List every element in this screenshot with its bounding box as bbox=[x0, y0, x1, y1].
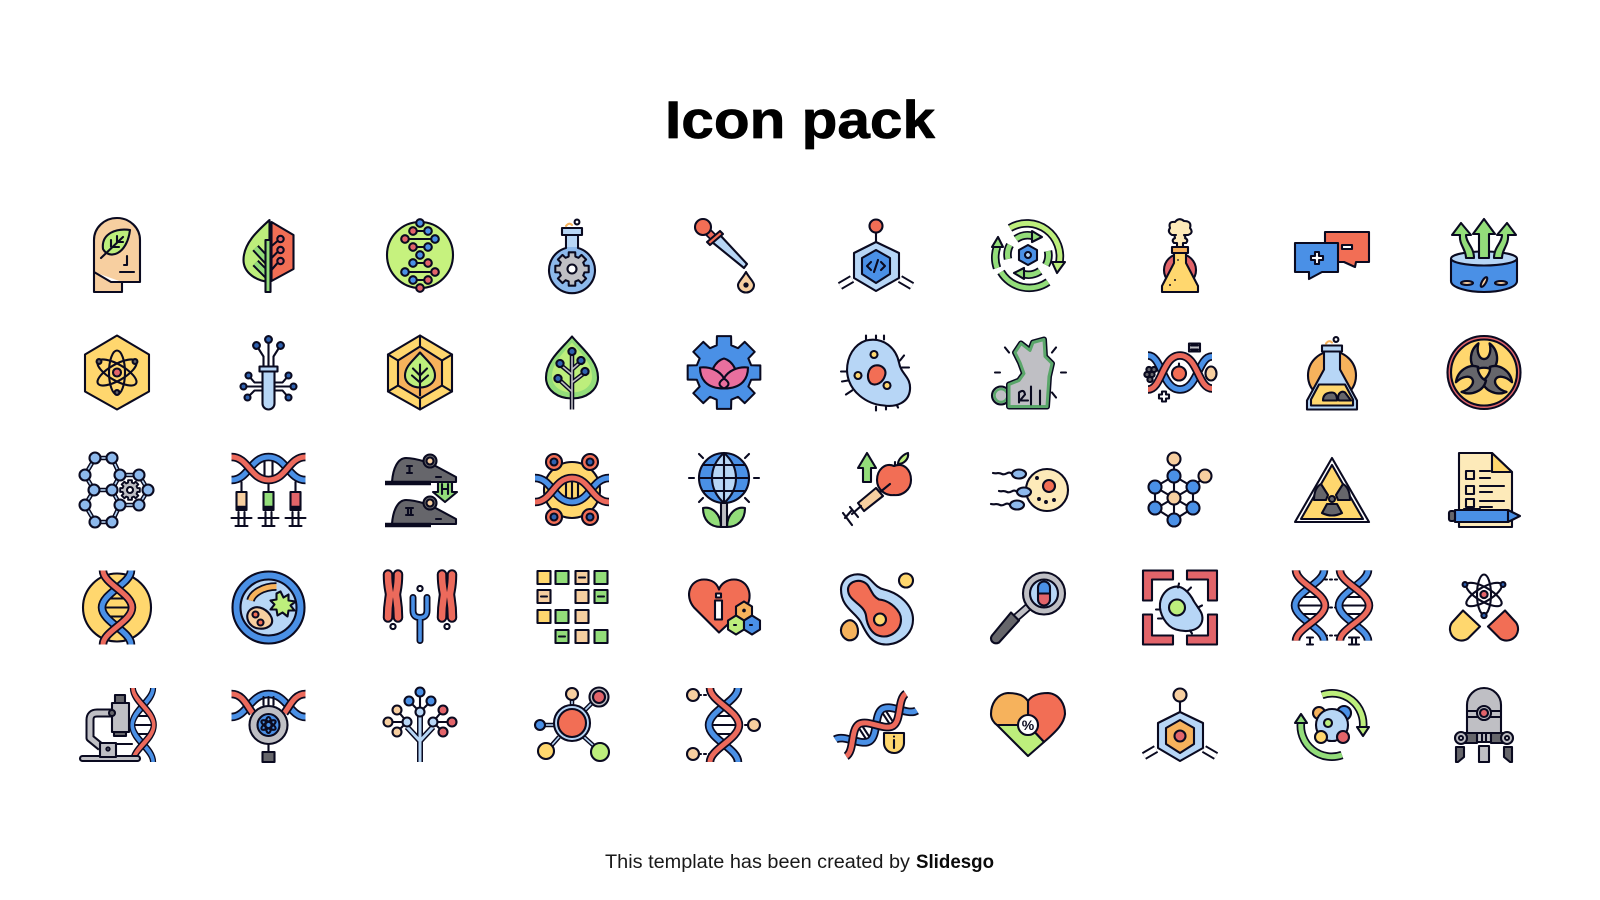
icon: petri dish organisms bbox=[232, 572, 304, 644]
title: Icon pack bbox=[665, 91, 936, 150]
icon: hexagon molecule with gear bbox=[80, 452, 154, 528]
icon: diagonal DNA with info badge bbox=[835, 694, 917, 756]
icon: microscope and DNA bbox=[80, 688, 154, 762]
icon: heart percent chart bbox=[991, 693, 1065, 756]
icon: hexagon leaf bbox=[388, 336, 452, 410]
icon: DNA with three syringes bbox=[232, 457, 306, 526]
icon: globe on plant bbox=[689, 453, 759, 527]
icon: bacterium cell bbox=[841, 336, 910, 410]
icon: chat bubbles plus minus bbox=[1295, 232, 1369, 279]
icon: syringe and apple bbox=[843, 453, 911, 525]
icon: molecule network bbox=[1148, 452, 1212, 526]
icon: hexagon molecule orange bbox=[1144, 688, 1216, 761]
icon: rabbit bbox=[992, 340, 1066, 406]
icon: capsule and atom bbox=[1450, 574, 1518, 641]
icon: DNA with four nodes bbox=[535, 454, 609, 525]
icon: gear lotus bbox=[688, 336, 760, 409]
icon: DNA over yellow circle bbox=[83, 570, 151, 644]
icon: gene grid squares bbox=[538, 571, 608, 643]
icon: DNA magnifier bbox=[232, 694, 306, 762]
icon: test tube circuit bbox=[240, 336, 296, 410]
icon grid bbox=[80, 218, 1520, 762]
icon: tree leaf bbox=[546, 336, 598, 410]
icon: circuit tree bbox=[384, 688, 456, 762]
icon: hexagon code bbox=[840, 220, 912, 291]
icon: DNA with nodes bbox=[687, 688, 760, 762]
icon: sperm and egg bbox=[991, 469, 1068, 511]
icon: chromosomes bbox=[388, 574, 452, 640]
icon: head with leaf bbox=[94, 218, 140, 292]
icon: checklist and pen bbox=[1449, 453, 1520, 527]
footer credit: This template has been created by bbox=[605, 852, 911, 873]
icon: molecule hub bbox=[535, 688, 609, 761]
icon: cell in scanner brackets bbox=[1143, 570, 1217, 644]
icon: exploding flask bbox=[1162, 219, 1198, 292]
icon: budding yeast cell bbox=[841, 574, 913, 644]
icon: heart percent chart: % bbox=[1022, 717, 1035, 733]
footer credit: Slidesgo bbox=[916, 852, 994, 873]
icon: flask with mice bbox=[1307, 337, 1357, 410]
icon: petri dish arrows bbox=[1451, 219, 1517, 292]
icon: two DNA strands bbox=[1295, 570, 1369, 644]
icon: DNA with fruits bbox=[1144, 344, 1216, 402]
icon: heart with info and hexagons bbox=[689, 580, 760, 634]
icon: robot gripper bbox=[1455, 688, 1513, 762]
icon: flask with gear bbox=[549, 220, 595, 293]
icon: magnifier with capsule bbox=[991, 572, 1065, 643]
icon: cell cycle arrows bbox=[1295, 693, 1369, 757]
icon: half leaf circuit bbox=[244, 220, 294, 292]
icon: biohazard sign bbox=[1448, 336, 1520, 409]
icon: lab mice with arrow bbox=[385, 454, 457, 525]
icon: hexagon atom bbox=[85, 336, 149, 410]
icon: recycling arrows with hexagon bbox=[992, 223, 1065, 288]
icon: dropper bbox=[695, 219, 754, 292]
icon: radiation triangle bbox=[1295, 458, 1369, 522]
icon: DNA dots in circle bbox=[387, 219, 453, 292]
